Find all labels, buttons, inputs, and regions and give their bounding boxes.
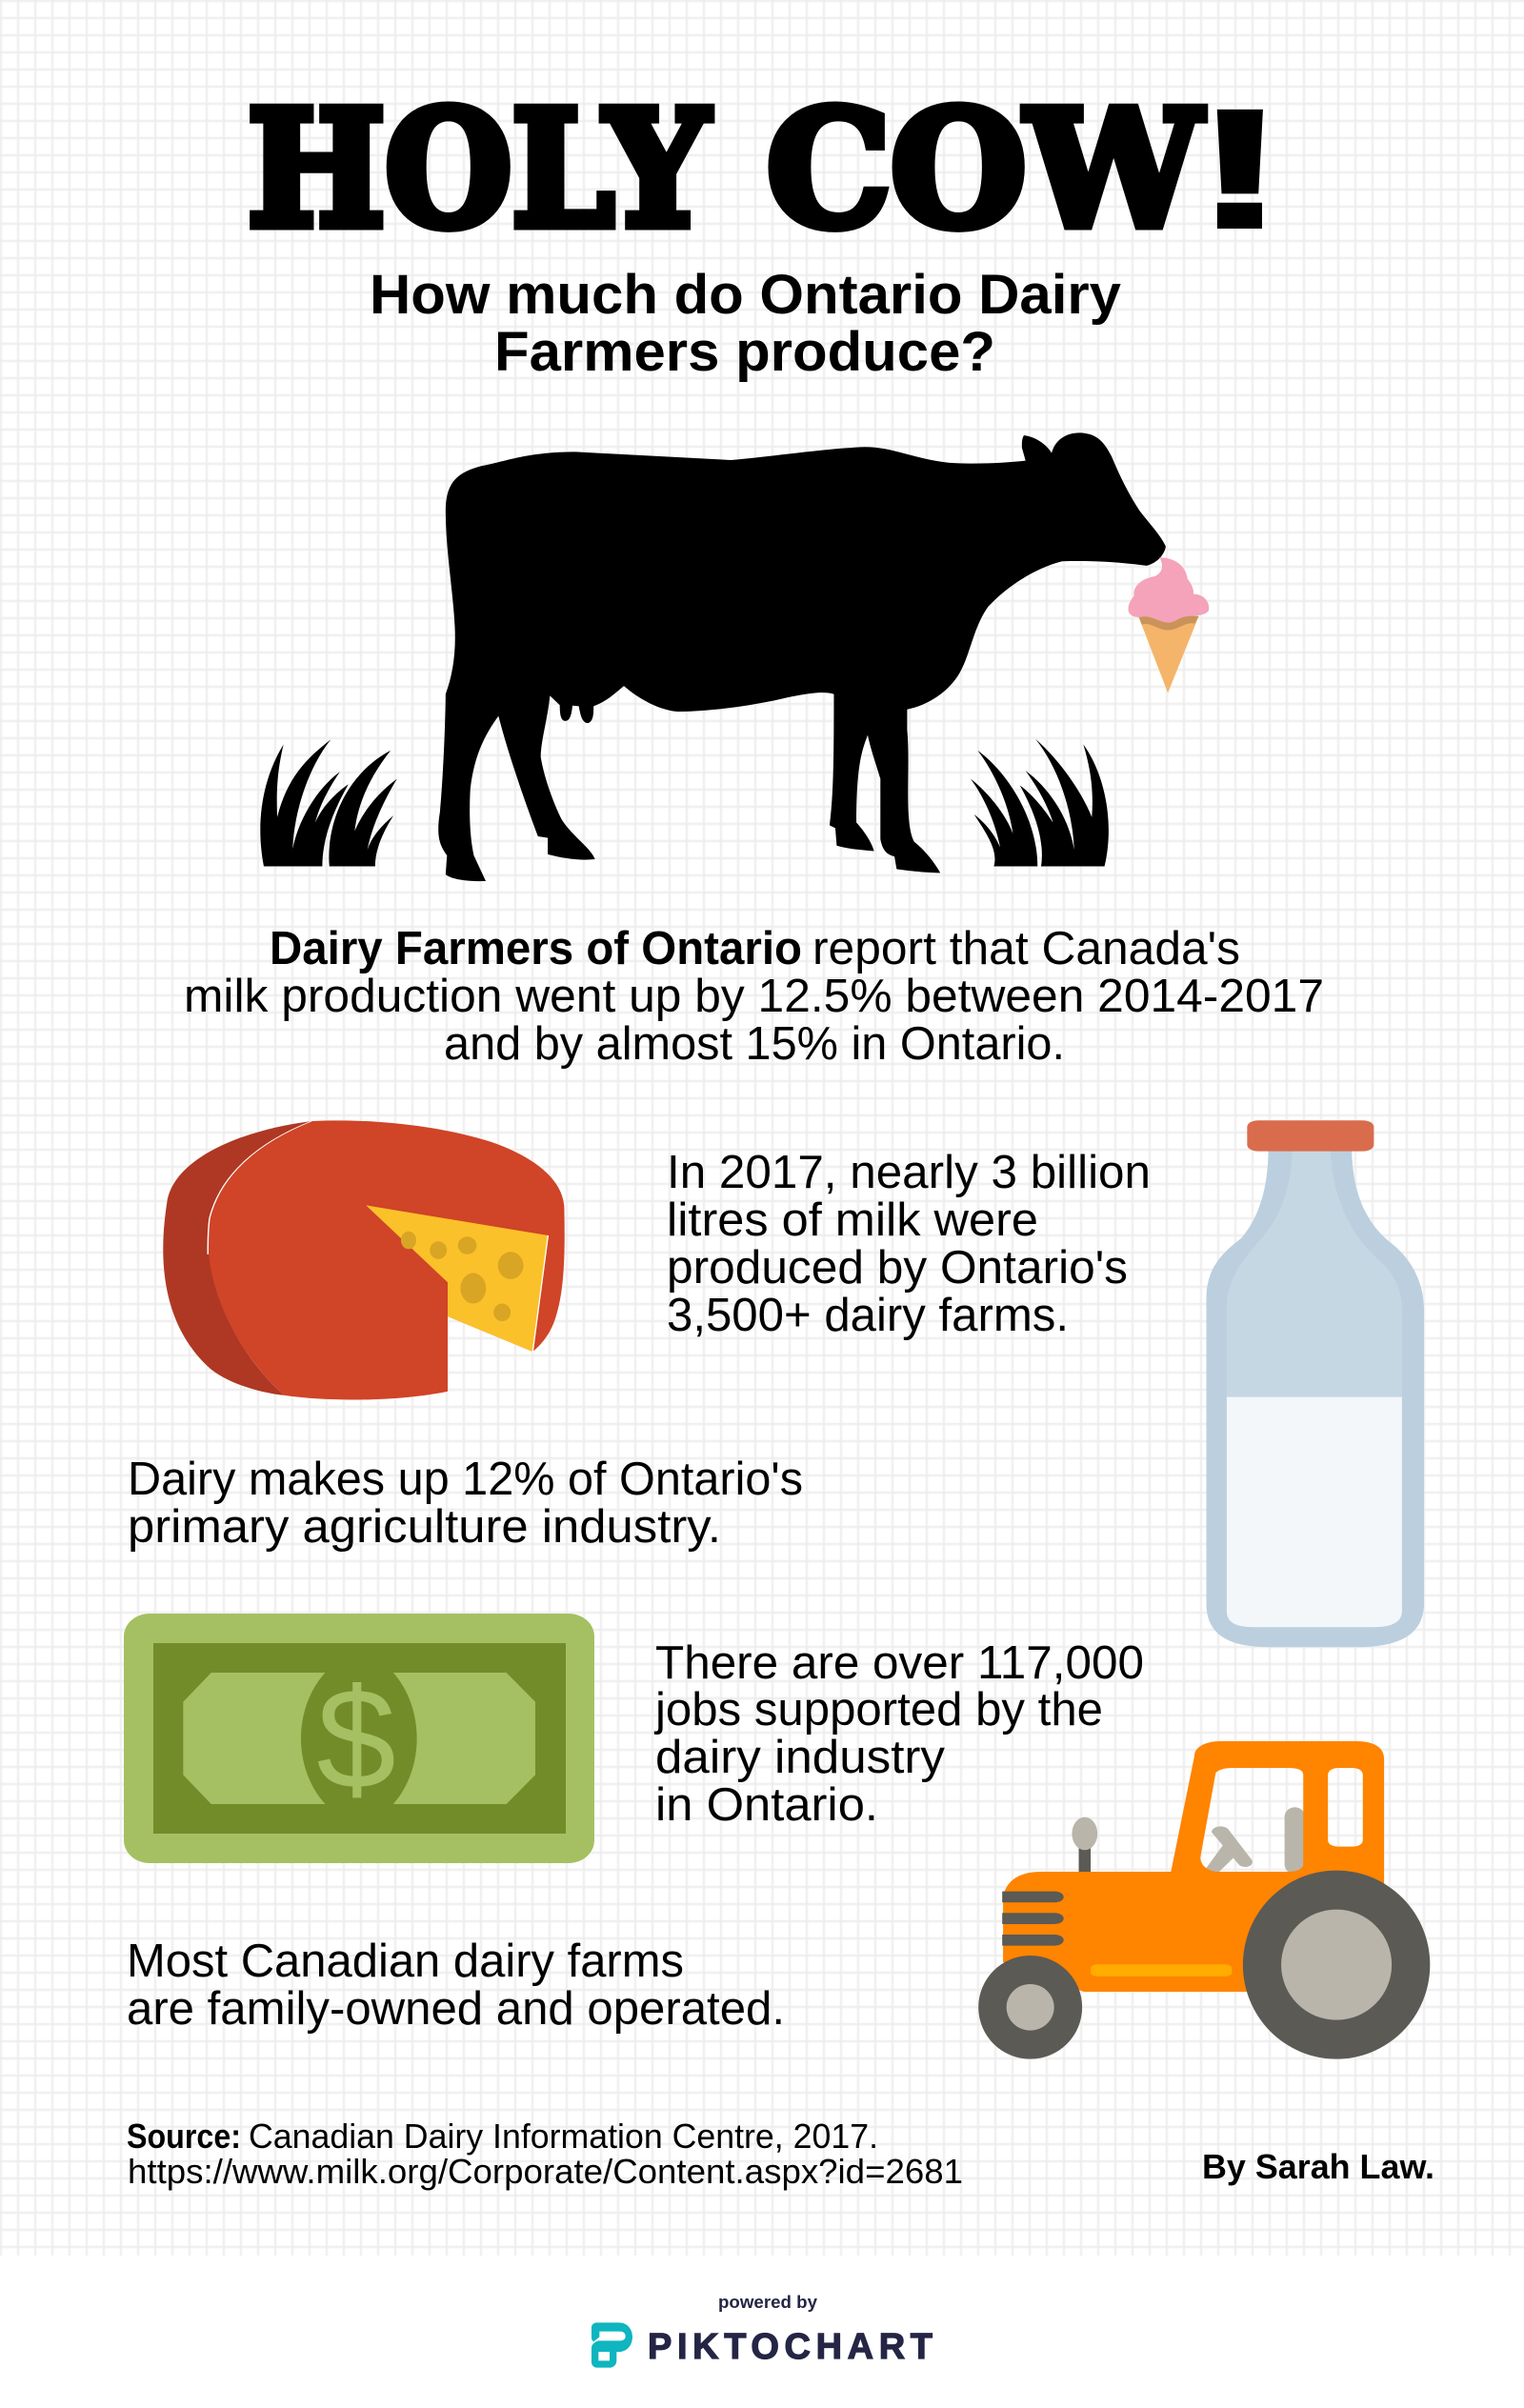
- text: 117,000 jobs: [653, 1637, 1144, 1831]
- text: 12% of agriculture: Dairy makes up 12% of Ontario's: [128, 1454, 803, 1505]
- subtitle: How much do Ontario Dairy: [370, 264, 1121, 326]
- icon: right grass: [971, 739, 1109, 867]
- paragraph: milk production: report that Canada's: [812, 923, 1240, 974]
- title: COW: [767, 76, 1203, 263]
- title: !: [1194, 76, 1286, 263]
- subtitle: [370, 264, 1121, 383]
- text: family-owned farms: are family-owned and operated.: [127, 1983, 785, 2035]
- subtitle: Farmers produce?: [494, 321, 995, 383]
- illustration: cow with ice cream and grass: [260, 432, 1209, 881]
- source citation: [127, 2117, 963, 2191]
- icon: dollar bill: [124, 1614, 594, 1863]
- icon: left grass: [260, 739, 397, 867]
- text: 3 billion litres: [667, 1147, 1151, 1341]
- text: 12% of agriculture: [128, 1454, 803, 1553]
- paragraph: milk production: milk production went up by 12.5% between 2014-2017: [184, 971, 1324, 1022]
- icon: orange tractor: [978, 1741, 1430, 2059]
- title: [248, 76, 1286, 263]
- text: family-owned farms: Most Canadian dairy farms: [127, 1936, 684, 1987]
- paragraph: milk production: Dairy Farmers of Ontario: [270, 923, 802, 974]
- text: 3 billion litres: 3,500+ dairy farms.: [667, 1290, 1069, 1341]
- title: HOLY: [248, 76, 711, 263]
- author credit: By Sarah Law.: [1202, 2147, 1434, 2186]
- footer: powered by piktochart: powered by: [718, 2292, 818, 2312]
- text: 3 billion litres: produced by Ontario's: [667, 1242, 1128, 1294]
- icon: ice cream cone: [1128, 557, 1209, 693]
- source citation: Source:: [127, 2117, 241, 2156]
- icon: milk bottle: [1206, 1120, 1424, 1647]
- source citation: https://www.milk.org/Corporate/Content.aspx?id=2681: [128, 2152, 963, 2191]
- icon: piktochart logo: [592, 2322, 632, 2368]
- text: 117,000 jobs: jobs supported by the: [653, 1684, 1103, 1736]
- icon: cow silhouette: [438, 432, 1166, 881]
- text: 117,000 jobs: There are over 117,000: [655, 1637, 1144, 1689]
- text: 117,000 jobs: in Ontario.: [655, 1779, 878, 1831]
- text: 12% of agriculture: primary agriculture industry.: [128, 1501, 721, 1553]
- paragraph: milk production: and by almost 15% in Ontario.: [444, 1018, 1065, 1070]
- paragraph: milk production: [184, 923, 1324, 1070]
- text: 3 billion litres: In 2017, nearly 3 billion: [667, 1147, 1151, 1198]
- text: 117,000 jobs: dairy industry: [655, 1732, 946, 1783]
- text: family-owned farms: [127, 1936, 785, 2035]
- source citation: Canadian Dairy Information Centre, 2017.: [249, 2117, 878, 2156]
- icon: dollar bill: $: [316, 1658, 396, 1818]
- icon: cheese wheel: [163, 1120, 565, 1400]
- footer: powered by piktochart: PIKTOCHART: [648, 2327, 932, 2367]
- text: 3 billion litres: litres of milk were: [667, 1194, 1038, 1246]
- footer: powered by piktochart: [592, 2292, 932, 2368]
